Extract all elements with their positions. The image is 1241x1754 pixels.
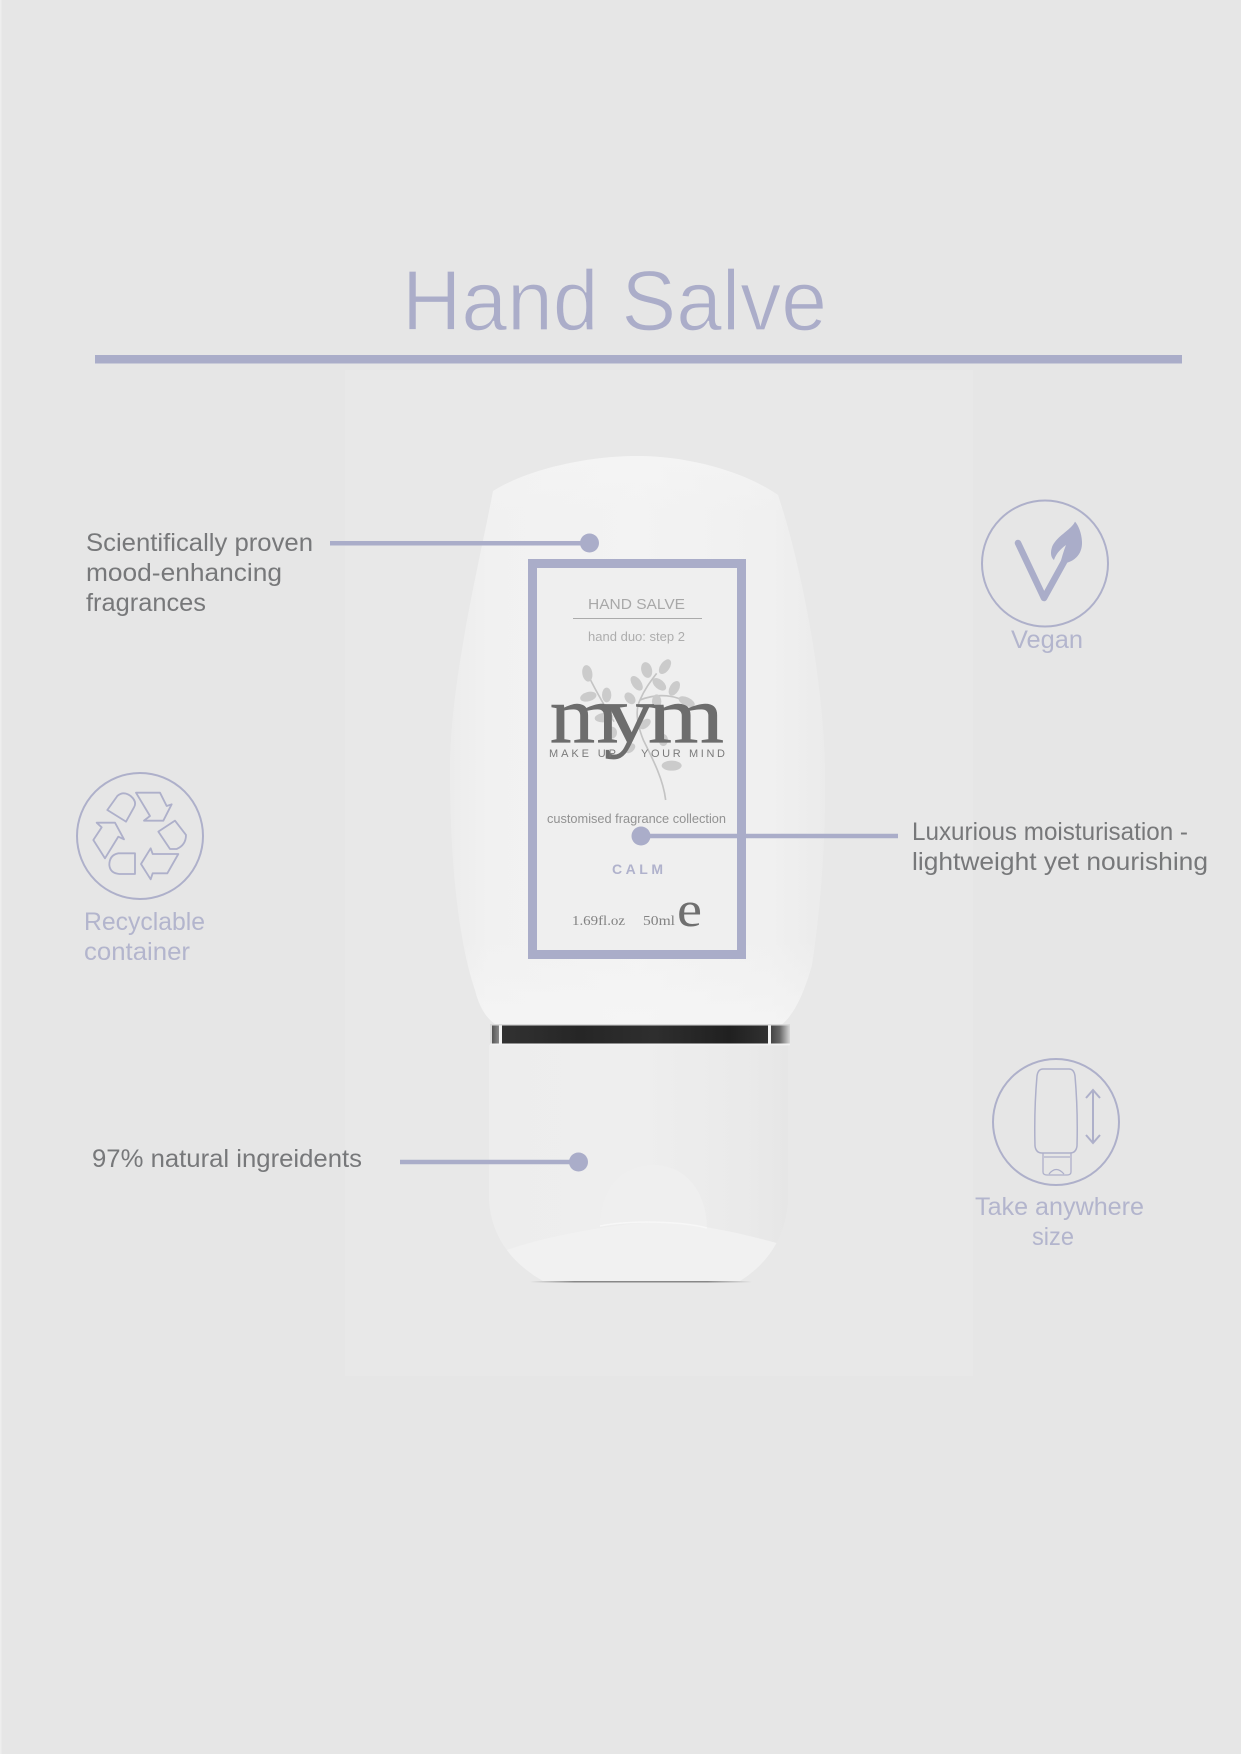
label subheading: hand duo: step 2	[588, 630, 685, 644]
icon: recyclable container	[77, 773, 205, 966]
label heading: HAND SALVE	[588, 596, 685, 613]
label volume: 1.69fl.oz	[572, 914, 625, 929]
callout: moisturisation: lightweight yet nourishing	[912, 848, 1208, 876]
logo tagline	[549, 748, 725, 760]
label: Vegan	[1011, 626, 1083, 654]
callout: fragrances: Scientifically proven	[86, 529, 313, 557]
logo: mym: m	[648, 672, 724, 760]
callout: natural ingredients: 97% natural ingreidents	[92, 1145, 362, 1173]
label fragrance name: CALM	[612, 861, 663, 877]
logo tagline: YOUR MIND	[641, 748, 725, 760]
logo: mym: m	[550, 672, 618, 760]
logo: mym: y	[604, 672, 654, 760]
callout: fragrances	[86, 529, 599, 617]
label: size	[1032, 1223, 1074, 1251]
tube cap	[508, 1221, 776, 1282]
label volume	[572, 881, 702, 937]
callout: moisturisation: Luxurious moisturisation -	[912, 818, 1188, 846]
label: Take anywhere	[975, 1193, 1144, 1221]
botanical sprig	[579, 657, 696, 800]
logo: mym	[550, 672, 724, 760]
label volume: e	[677, 881, 702, 937]
label: container	[84, 938, 190, 966]
callout: fragrances: fragrances	[86, 589, 206, 617]
icon: take anywhere size	[975, 1059, 1144, 1251]
label	[84, 908, 205, 966]
label volume: 50ml	[643, 914, 675, 929]
logo tagline: MAKE UP	[549, 748, 616, 760]
product label	[532, 564, 742, 954]
title: Hand Salve	[402, 254, 827, 349]
label frame	[532, 564, 742, 954]
callout: fragrances: mood-enhancing	[86, 559, 282, 587]
callout: natural ingredients	[92, 1145, 588, 1173]
callout: moisturisation	[632, 818, 1208, 876]
label: Recyclable	[84, 908, 205, 936]
label collection line: customised fragrance collection	[547, 812, 726, 826]
label	[975, 1193, 1144, 1251]
tube body	[450, 456, 825, 1026]
product: hand salve tube	[468, 456, 805, 1282]
icon: vegan	[982, 500, 1108, 654]
chrome collar	[490, 1024, 790, 1045]
